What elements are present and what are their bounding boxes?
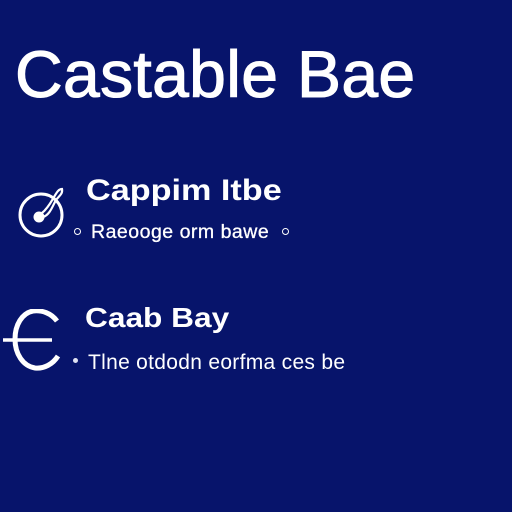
bullet label: Tlne otdodn eorfma ces be [88, 351, 345, 374]
icon: music note in circle [18, 188, 64, 238]
bullet [73, 358, 78, 363]
section 2 heading: Caab Bay [85, 302, 229, 333]
section 1 heading: Cappim Itbe [86, 174, 282, 207]
section 2 [3, 302, 345, 374]
title: Castable Bae [15, 37, 415, 111]
icon: euro sign [3, 309, 60, 371]
trailing bullet [282, 228, 289, 235]
bullet [74, 228, 81, 235]
bullet label: Raeooge orm bawe [91, 221, 269, 243]
section 2 bullet text [73, 351, 345, 374]
section 1 bullet text [74, 221, 289, 243]
section 1 [18, 174, 289, 243]
